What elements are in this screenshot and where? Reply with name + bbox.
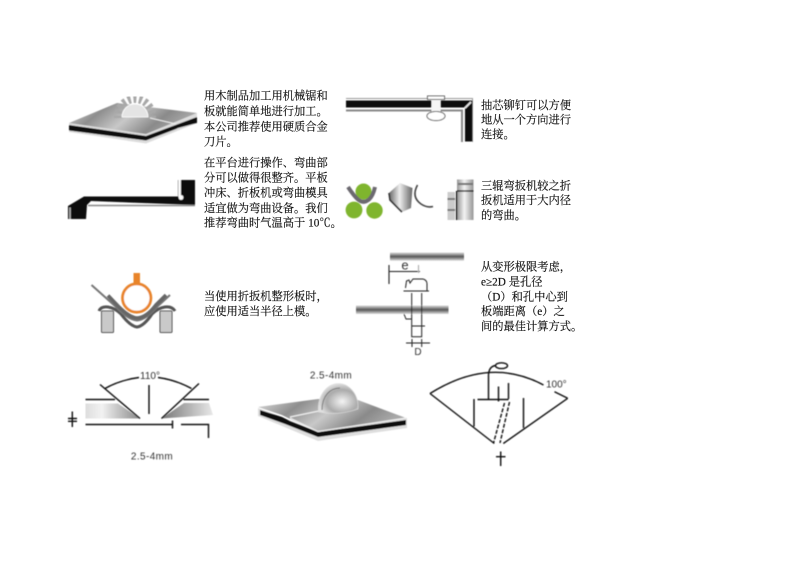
text: saw note: 刀片。 [204, 134, 238, 148]
text: rivet note: 地从一个方向进行 [481, 112, 571, 126]
text: three-roll note: 扳机适用于大内径 [481, 193, 572, 207]
text: bending note: 推荐弯曲时气温高于 10℃。 [204, 216, 342, 230]
dimension: D: D [414, 347, 422, 358]
illustration: three-roll bending [346, 180, 474, 220]
text: saw note: 板就能简单地进行加工。 [204, 104, 328, 118]
dimension: e: e [401, 258, 409, 272]
illustration: press brake die forming [92, 273, 175, 332]
text: saw note: 用木制品加工用机械锯和 [204, 88, 328, 102]
text: rivet note [481, 98, 571, 141]
text: bending note: 冲床、折板机或弯曲模具 [204, 186, 329, 200]
text: three-roll note [481, 178, 572, 222]
text: edge distance note [481, 260, 582, 333]
text: saw note: 本公司推荐使用硬质合金 [204, 120, 328, 134]
illustration: weld bead on sheet: 2.5-4mm [310, 370, 352, 382]
label: 100 degrees: 100° [546, 380, 567, 390]
text: bending note: 分可以做得很整齐。平板 [204, 170, 328, 184]
text: bending note [204, 156, 342, 230]
text: edge distance note: e≥2D 是孔径 [481, 274, 543, 288]
text: edge distance note: （D）和孔中心到 [481, 290, 568, 304]
illustration: 110 degree groove weld [68, 371, 213, 462]
illustration: 100 degree weld [430, 363, 568, 466]
text: upper die note: 应使用适当半径上模。 [204, 304, 317, 318]
text: bending note: 在平台进行操作、弯曲部 [204, 156, 328, 170]
illustration: blind rivet joint [346, 96, 472, 142]
text: three-roll note: 三辊弯扳机较之折 [481, 178, 571, 192]
illustration: weld bead on sheet [258, 370, 407, 441]
text: upper die note [204, 289, 328, 318]
label: gap size: 2.5-4mm [131, 452, 173, 462]
illustration: saw cutting a sheet [69, 99, 197, 144]
text: rivet note: 抽芯铆钉可以方便 [481, 98, 571, 112]
text: rivet note: 连接。 [481, 127, 515, 141]
illustration: rivet hole edge distance [356, 252, 464, 358]
label: 110 degrees: 110° [140, 371, 160, 382]
rivet section [404, 279, 429, 337]
text: saw note [204, 88, 328, 148]
text: bending note: 适宜做为弯曲设备。我们 [204, 201, 328, 215]
text: edge distance note: 板端距离（e）之 [481, 304, 565, 318]
text: edge distance note: 从变形极限考虑， [481, 260, 571, 274]
illustration: bent sheet profile [68, 180, 195, 219]
text: upper die note: 当使用折扳机整形板时， [204, 289, 328, 303]
text: three-roll note: 的弯曲。 [481, 208, 526, 222]
text: edge distance note: 间的最佳计算方式。 [481, 319, 582, 333]
